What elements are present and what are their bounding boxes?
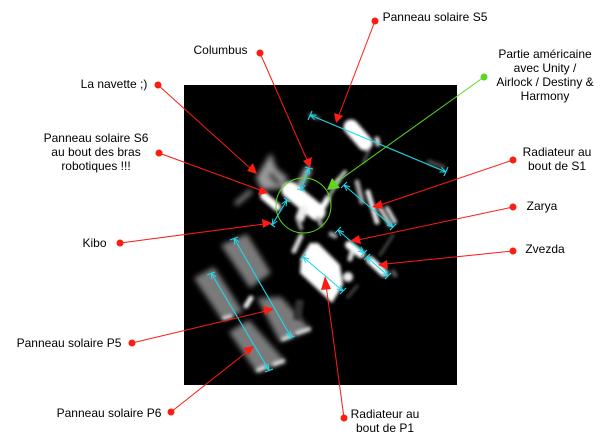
label: P1 radiator: bout de P1 — [356, 421, 414, 435]
arrow: Zarya — [350, 204, 516, 244]
arrow: S1 radiator — [372, 156, 516, 209]
arrow: P6 — [168, 346, 254, 416]
green circle: American section — [276, 178, 331, 233]
arrow: P5 — [128, 306, 274, 346]
bright array edges — [224, 298, 309, 370]
label: S6: Panneau solaire S6 — [44, 131, 149, 145]
label: P5: Panneau solaire P5 — [17, 336, 122, 350]
label: S1 radiator: Radiateur au — [523, 145, 591, 159]
label: S6: au bout des bras — [51, 145, 141, 159]
cyan measurement lines — [207, 111, 448, 372]
label: S5: Panneau solaire S5 — [383, 10, 488, 24]
arrow: P1 radiator — [321, 276, 348, 422]
arrow: shuttle — [154, 82, 257, 174]
label: Columbus: Columbus — [193, 43, 248, 57]
label: S1 radiator: bout de S1 — [528, 159, 586, 173]
red arrows — [116, 18, 516, 422]
label: American section: Airlock / Destiny & — [496, 75, 594, 89]
arrow: S5 — [334, 18, 378, 123]
S5 solar array — [310, 115, 443, 186]
arrow: Kibo — [116, 219, 272, 246]
arrow: S6 — [156, 150, 268, 195]
label: American section: Partie américaine — [498, 47, 592, 61]
label: shuttle: La navette ;) — [81, 77, 147, 91]
label: S6: robotiques !!! — [61, 159, 131, 173]
label: American section: avec Unity / — [514, 61, 577, 75]
label: P1 radiator: Radiateur au — [351, 407, 419, 421]
S1 radiators — [357, 182, 395, 255]
arrow: Zvezda — [378, 248, 516, 269]
photo: ISS telescope image — [184, 85, 457, 385]
green arrow: American section — [327, 74, 488, 190]
arrow: Columbus — [256, 50, 312, 168]
label: American section: Harmony — [521, 89, 569, 103]
Radiator P1 — [294, 236, 358, 320]
label: Zvezda: Zvezda — [525, 242, 565, 256]
Zarya and Zvezda modules — [331, 234, 395, 275]
solar arrays P5 and P6 — [194, 234, 311, 373]
shuttle region — [256, 153, 288, 190]
label: P6: Panneau solaire P6 — [57, 406, 162, 420]
label: Kibo: Kibo — [82, 236, 107, 250]
central module — [264, 180, 339, 228]
label: Zarya: Zarya — [527, 199, 558, 213]
